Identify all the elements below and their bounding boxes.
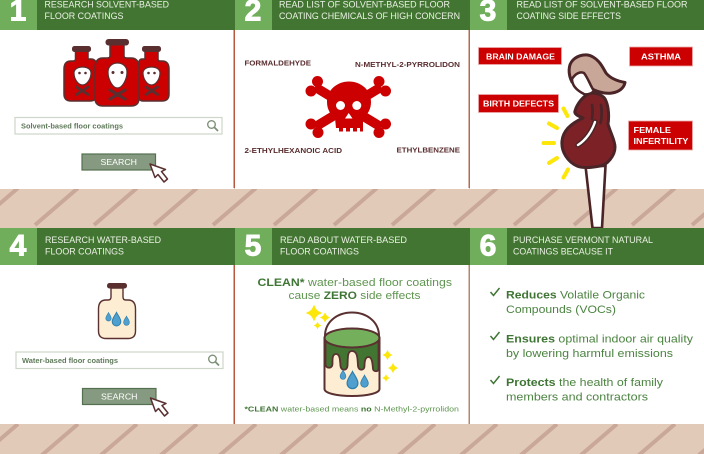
headline: clean coatings: CLEAN* water-based floor coatings bbox=[258, 277, 453, 289]
arm highlight bbox=[578, 122, 595, 145]
floor band: upper bbox=[0, 188, 704, 228]
step 6 header: COATINGS BECAUSE IT bbox=[513, 246, 614, 256]
icon: water-based bottle bbox=[98, 283, 136, 338]
legs bbox=[586, 166, 606, 228]
headline: zero side effects: cause ZERO side effects bbox=[288, 290, 421, 302]
step 5 header: 5 bbox=[245, 230, 261, 262]
panel 5: read about water-based floor coatings bbox=[235, 228, 470, 424]
step 2 header bbox=[235, 0, 470, 30]
icon: mouse cursor bbox=[150, 398, 168, 416]
floor band: lower bbox=[0, 424, 704, 454]
step 5 header: FLOOR COATINGS bbox=[280, 246, 359, 256]
side effect: birth defects: BIRTH DEFECTS bbox=[483, 98, 554, 108]
benefit: protects health: members and contractors bbox=[506, 392, 649, 404]
search button bbox=[82, 388, 156, 404]
benefit: reduces VOCs: Compounds (VOCs) bbox=[506, 304, 616, 316]
face bbox=[572, 72, 594, 94]
hair bbox=[569, 55, 625, 93]
side effect: brain damage: BRAIN DAMAGE bbox=[486, 52, 555, 62]
chemical label: ethylbenzene: ETHYLBENZENE bbox=[396, 146, 460, 154]
step 4 header: RESEARCH WATER-BASED bbox=[45, 235, 161, 245]
yellow rays bbox=[544, 108, 568, 178]
step 6 header bbox=[470, 228, 704, 265]
step 4 header: 4 bbox=[10, 230, 27, 262]
side effect: female infertility bbox=[628, 121, 692, 150]
step 2 header: COATING CHEMICALS OF HIGH CONCERN bbox=[279, 11, 460, 21]
step 5 header bbox=[235, 228, 470, 265]
panel 3: side effects bbox=[470, 0, 704, 189]
side effect: birth defects bbox=[478, 94, 558, 112]
benefit: reduces VOCs: Reduces Volatile Organic bbox=[506, 290, 646, 302]
icon: skull and crossbones bbox=[306, 76, 391, 138]
benefit: protects health bbox=[490, 376, 664, 404]
chemical label: formaldehyde: FORMALDEHYDE bbox=[244, 58, 311, 68]
search box: Solvent-based floor coatings bbox=[21, 122, 123, 130]
search box bbox=[15, 118, 222, 134]
side effect: female infertility: FEMALE bbox=[634, 125, 671, 135]
arm lines bbox=[592, 105, 602, 123]
step 1 header bbox=[0, 0, 235, 30]
benefit: ensures air quality bbox=[490, 332, 694, 360]
side effect: asthma: ASTHMA bbox=[641, 52, 681, 62]
search box bbox=[16, 352, 223, 368]
search button: SEARCH bbox=[101, 392, 138, 402]
step 4 header bbox=[0, 228, 235, 265]
icon: mouse cursor bbox=[150, 164, 168, 182]
side effect: female infertility: INFERTILITY bbox=[634, 136, 689, 146]
search button: SEARCH bbox=[100, 157, 137, 167]
step 6 header: 6 bbox=[480, 230, 496, 262]
chemical label: n-methyl-2-pyrrolidon: N-METHYL-2-PYRROLIDON bbox=[355, 60, 460, 69]
benefit: reduces VOCs bbox=[490, 288, 646, 316]
panel 6: purchase vermont natural coatings bbox=[470, 228, 704, 424]
icon: paint bucket with sparkles bbox=[307, 306, 397, 396]
benefit: ensures air quality: by lowering harmful emissions bbox=[506, 348, 674, 360]
panel 4: research water-based floor coatings bbox=[0, 228, 235, 424]
panel 1: research solvent-based floor coatings bbox=[0, 0, 235, 189]
step 6 header: PURCHASE VERMONT NATURAL bbox=[513, 235, 653, 245]
icon: three poison bottles bbox=[64, 39, 169, 106]
footnote: *CLEAN water-based means no N-Methyl-2-pyrrolidon bbox=[244, 404, 459, 414]
step 1 header: FLOOR COATINGS bbox=[44, 11, 124, 21]
benefit: ensures air quality: Ensures optimal indoor air quality bbox=[506, 334, 694, 346]
panel 2: chemicals of high concern bbox=[235, 0, 470, 189]
step 3 header bbox=[470, 0, 704, 30]
illustration: pregnant woman bbox=[544, 55, 625, 228]
dress bbox=[562, 93, 615, 168]
benefit: protects health: Protects the health of family bbox=[506, 377, 664, 389]
side effect: asthma bbox=[630, 47, 692, 66]
search button bbox=[82, 154, 156, 170]
search box: Water-based floor coatings bbox=[22, 356, 118, 365]
chemical label: 2-ethylhexanoic acid: 2-ETHYLHEXANOIC ACID bbox=[244, 146, 343, 155]
step 4 header: FLOOR COATINGS bbox=[45, 246, 124, 256]
step 5 header: READ ABOUT WATER-BASED bbox=[280, 235, 407, 245]
side effect: brain damage bbox=[478, 48, 562, 64]
step 3 header: COATING SIDE EFFECTS bbox=[516, 11, 621, 21]
